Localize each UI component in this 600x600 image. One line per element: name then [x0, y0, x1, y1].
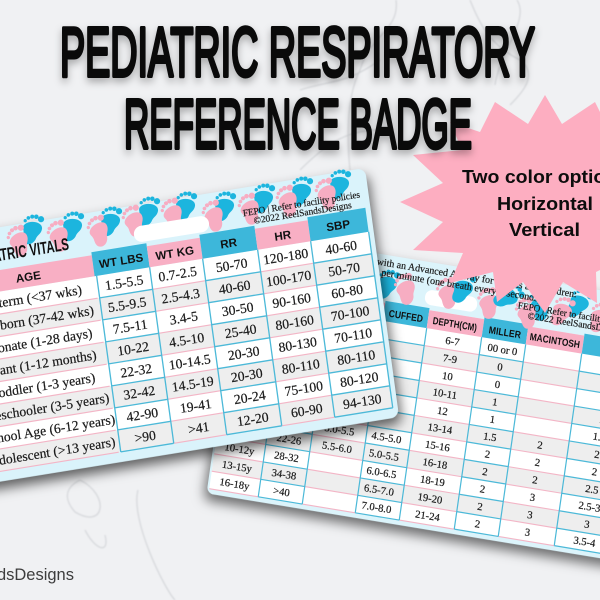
back card table values: 18-19 [419, 474, 445, 489]
back card table values: 2 [476, 502, 483, 513]
front card table values: 20-30 [227, 343, 261, 363]
back card table values [219, 303, 600, 550]
back card table values: 6-7 [445, 336, 460, 349]
back card table values: 12 [436, 406, 448, 418]
front card headers [0, 208, 369, 297]
back card notes: with an Advanced Airway for infants and children: [376, 257, 578, 300]
front reference card: pediatric vitals [0, 168, 399, 488]
back reference card: airway [207, 231, 600, 566]
back card table values: 7.0-8.0 [361, 500, 392, 516]
starburst callout [400, 95, 600, 313]
front card table values: 14.5-19 [171, 373, 215, 395]
front card table values: 12-20 [236, 409, 270, 429]
front card table values: 80-160 [275, 312, 315, 333]
back card table values: 4.5-5.0 [371, 431, 402, 446]
front card table values: 50-70 [215, 255, 249, 275]
front card headers: WT KG [155, 244, 195, 263]
front card table values: 20-30 [230, 365, 264, 385]
front card feet [4, 168, 352, 259]
back card table values: 2 [531, 475, 538, 487]
back card table values: 3 [583, 519, 590, 531]
front card note: FEPO | Refer to facility policies [242, 189, 361, 219]
back card table values: 3 [526, 510, 533, 522]
back card table values: 2 [591, 467, 598, 479]
back card table values: 1 [489, 414, 496, 426]
back card table values: 6.0-6.5 [366, 466, 397, 481]
front card table values: 25-40 [224, 321, 258, 341]
starburst callout: Vertical [509, 220, 580, 240]
front card table values: 5.5-9.5 [107, 294, 147, 315]
back card table values: 5.5-6.0 [321, 440, 352, 456]
front card headers: WT LBS [98, 251, 144, 271]
back card table values: 2 [481, 467, 488, 479]
back card table values: 2 [484, 449, 491, 461]
back card table values: 5.0-5.5 [368, 448, 399, 464]
front card headers: RR [220, 236, 238, 252]
back card table values: 13-15y [221, 460, 253, 476]
front card table values: 80-110 [281, 356, 321, 377]
front card table values: 0.7-2.5 [158, 264, 198, 285]
front card table values: >90 [134, 428, 157, 446]
back card table values: >40 [272, 486, 290, 499]
front card table values: 90-160 [272, 290, 312, 311]
back card table values: 1.5 [482, 431, 497, 444]
back card headers: MILLER [488, 325, 522, 341]
front card table values: 1.5-5.5 [104, 272, 144, 293]
front card table values: 75-100 [284, 378, 324, 399]
back card headers: MACINTOSH [529, 332, 581, 351]
back card table values: 6.5-7.0 [363, 483, 394, 499]
front card table values: 10-14.5 [168, 351, 212, 373]
back card table values: 22-26 [276, 433, 302, 448]
back card table values: 7-9 [442, 353, 458, 366]
front card table values: 30-50 [221, 299, 255, 319]
front card table values: >41 [187, 419, 210, 437]
front card table values: 42-90 [125, 405, 159, 425]
front card table values: 32-42 [122, 383, 156, 403]
front card table values: 80-130 [278, 334, 318, 355]
front card table values: 20-24 [233, 387, 267, 407]
back card table values: 5.0-5.5 [324, 423, 355, 439]
back card table values: 3 [524, 527, 531, 539]
back card feet [374, 267, 600, 334]
back card table values: 10-11 [432, 387, 458, 402]
front card table values: 4.5-10 [168, 330, 205, 350]
front card table values [0, 237, 383, 471]
front card table values: 60-90 [290, 401, 324, 421]
back card table values: 10 [441, 371, 453, 383]
front card note: ©2022 ReelSandsDesigns [253, 200, 353, 227]
back card table values: 1 [491, 397, 498, 409]
front card table values: 2.5-4.3 [161, 286, 201, 307]
back card table values: 16-18 [422, 457, 448, 472]
front card headers: SBP [326, 218, 351, 234]
front card headers: AGE [15, 269, 42, 286]
back card table values: 28-32 [273, 450, 299, 465]
back card headers [237, 277, 600, 363]
back card table values: 13-14 [427, 422, 454, 437]
front card table values: 3.4-5 [169, 308, 199, 328]
front card table values: 40-60 [218, 277, 252, 297]
title [60, 13, 535, 163]
front card pill [133, 215, 210, 243]
back card headers: DEPTH(CM) [432, 316, 478, 334]
front card table values: 50-70 [327, 260, 361, 280]
back card table values: 19-20 [417, 492, 443, 507]
back card table values: 00 or 0 [487, 343, 518, 358]
back card table values: 0 [494, 380, 501, 391]
back card table values: 0 [496, 362, 503, 374]
back card pill [424, 289, 478, 313]
back card table values: 3.5-4 [573, 535, 597, 550]
back card table values: 2.5 [585, 484, 599, 497]
front card table values: 70-110 [333, 325, 373, 346]
front card table values: 120-180 [262, 245, 309, 268]
back card table values: 2 [479, 484, 486, 496]
front card table values: 80-110 [336, 347, 376, 368]
front card table values: 7.5-11 [112, 317, 148, 337]
front card table values: 19-41 [179, 396, 212, 416]
starburst callout: Horizontal [497, 194, 593, 214]
back card table values: 2 [534, 458, 541, 469]
front card table values: 22-32 [119, 361, 153, 381]
back card table values: 16-18y [219, 477, 251, 493]
front card table values: 70-100 [330, 303, 370, 324]
back card notes: per minute (one breath every 3 seconds) [381, 268, 542, 305]
back card table values: 34-38 [271, 468, 297, 483]
front card table values: 60-80 [330, 282, 364, 302]
front card table values: 10-22 [116, 339, 150, 359]
front card headers: HR [274, 228, 293, 244]
front card table values: 80-120 [339, 369, 380, 390]
back card table values: 21-24 [414, 509, 441, 524]
back card headers: CUFFED [388, 309, 424, 325]
front card table values: 94-130 [342, 391, 383, 412]
back card notes [372, 257, 600, 339]
back card table values: 10-12y [224, 442, 256, 458]
front card table values: 100-170 [265, 267, 312, 290]
front card table values: 40-60 [324, 238, 358, 258]
back card table values: 3 [529, 492, 536, 504]
back card table values: 2 [474, 519, 481, 531]
back card table values: 2 [536, 440, 543, 452]
back card table values: 15-16 [424, 440, 450, 454]
